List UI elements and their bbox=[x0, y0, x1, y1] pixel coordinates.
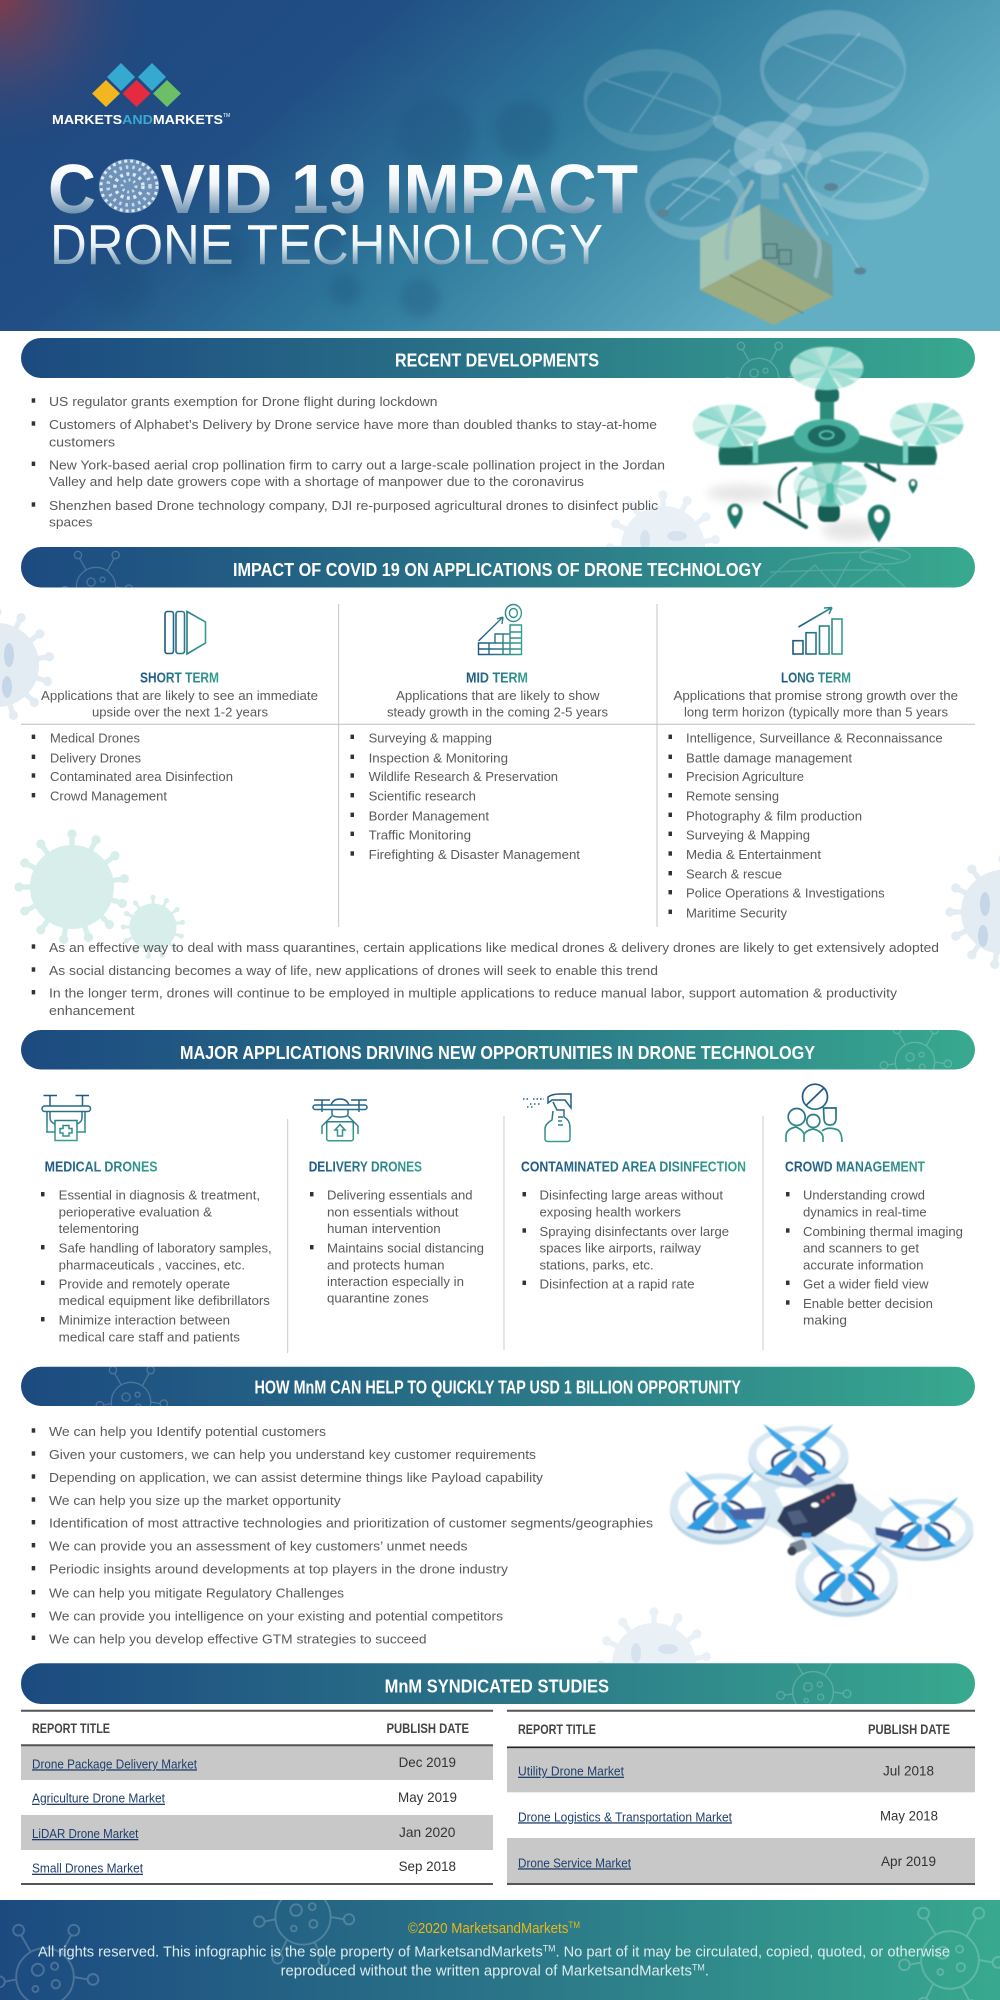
parcel bbox=[700, 204, 833, 325]
table: left reports: Small Drones Market bbox=[32, 1861, 143, 1876]
column: long term bbox=[668, 608, 958, 920]
list: mid term: Wildlife Research & Preservation bbox=[369, 769, 558, 784]
decorative virus: help section bbox=[597, 1608, 711, 1663]
logo: TM bbox=[223, 113, 230, 119]
list: contaminated area disinfection: Disinfection at a rapid rate bbox=[540, 1276, 694, 1291]
description: short term: upside over the next 1-2 years bbox=[92, 705, 268, 720]
legal notice: All rights reserved. This infographic is the sole property of MarketsandMarkets bbox=[38, 1944, 555, 1961]
list: contaminated area disinfection: spaces like airports, railway bbox=[540, 1241, 702, 1256]
table: left reports: Dec 2019 bbox=[399, 1754, 456, 1770]
list: mid term: Scientific research bbox=[369, 789, 476, 804]
logo bbox=[52, 63, 230, 127]
description: mid term bbox=[387, 688, 608, 720]
logo: MARKETS AND MARKETS bbox=[52, 113, 223, 127]
list: how mnm can help: Periodic insights around developments at top players in the drone industry bbox=[49, 1562, 509, 1577]
table: left reports: Sep 2018 bbox=[399, 1858, 456, 1874]
list: mid term: Border Management bbox=[369, 808, 489, 823]
list: crowd management: Combining thermal imaging bbox=[803, 1224, 963, 1239]
legal notice: . bbox=[705, 1962, 709, 1979]
table: right reports: REPORT TITLE bbox=[518, 1722, 596, 1737]
list: how mnm can help: Depending on application, we can assist determine things like Payload capability bbox=[49, 1470, 544, 1485]
icon: mid term growth stack bbox=[478, 604, 522, 654]
icon: spray bottle bbox=[523, 1094, 571, 1142]
list: delivery drones: quarantine zones bbox=[327, 1291, 429, 1306]
list: mid term: Surveying & mapping bbox=[369, 730, 492, 745]
hub bbox=[794, 419, 860, 457]
heading: medical drones: MEDICAL DRONES bbox=[45, 1159, 158, 1176]
list: recent developments: New York-based aerial crop pollination firm to carry out a large-scale pollination project in the Jordan bbox=[49, 457, 665, 472]
list: delivery drones: human intervention bbox=[327, 1221, 441, 1236]
list: long term: Media & Entertainment bbox=[686, 847, 821, 862]
decorative virus: behind drone bbox=[606, 490, 720, 547]
footer bbox=[0, 1900, 1000, 2000]
list: long term: Photography & film production bbox=[686, 808, 862, 823]
description: long term bbox=[674, 688, 958, 720]
list: crowd management: Enable better decision bbox=[803, 1296, 933, 1311]
list: recent developments: Customers of Alphabet’s Delivery by Drone service have more than doubled thanks to stay-at-home bbox=[49, 417, 657, 432]
legal notice bbox=[38, 1944, 950, 1979]
column: mid term bbox=[350, 604, 608, 862]
list: medical drones: Provide and remotely operate bbox=[59, 1276, 230, 1291]
list: how mnm can help: Identification of most attractive technologies and prioritization of customer segments/geographies bbox=[49, 1516, 654, 1531]
list: medical drones: telementoring bbox=[59, 1221, 139, 1236]
list: impact takeaways: As an effective way to deal with mass quarantines, certain applications like medical drones & delivery drones are likely to get extensively adopted bbox=[49, 940, 939, 955]
table: left reports: REPORT TITLE bbox=[32, 1721, 110, 1736]
map pins bbox=[727, 504, 743, 529]
icon: short term panels bbox=[165, 612, 206, 654]
list: medical drones: medical equipment like defibrillators bbox=[59, 1293, 271, 1308]
list: long term: Search & rescue bbox=[686, 867, 782, 882]
decorative virus: right edge bbox=[945, 854, 1000, 970]
heading: delivery drones: DELIVERY DRONES bbox=[309, 1159, 422, 1176]
decorative virus: left top bbox=[0, 607, 55, 723]
list: recent developments: customers bbox=[49, 435, 116, 450]
table: left reports: LiDAR Drone Market bbox=[32, 1826, 139, 1841]
icon: delivery drone bbox=[313, 1099, 367, 1141]
list: impact takeaways: As social distancing becomes a way of life, new applications of drones will seek to enable this trend bbox=[49, 963, 658, 978]
heading: long term: LONG TERM bbox=[781, 670, 851, 687]
banner: recent developments: RECENT DEVELOPMENTS bbox=[395, 350, 599, 370]
heading: crowd management: CROWD MANAGEMENT bbox=[785, 1159, 925, 1176]
list: short term: Delivery Drones bbox=[50, 750, 141, 765]
illustration: delivery drone with parcel bbox=[584, 10, 929, 325]
title line 2: DRONE TECHNOLOGY bbox=[50, 213, 603, 277]
list: long term: Police Operations & Investigations bbox=[686, 886, 885, 901]
list: short term: Crowd Management bbox=[50, 789, 167, 804]
copyright: ©2020 MarketsandMarkets bbox=[408, 1920, 588, 1937]
list: impact takeaways: enhancement bbox=[49, 1003, 135, 1018]
rear arm bbox=[815, 372, 839, 430]
heading: contaminated area disinfection: CONTAMINATED AREA DISINFECTION bbox=[521, 1159, 746, 1176]
list: mid term: Firefighting & Disaster Management bbox=[369, 847, 580, 862]
table: right reports: PUBLISH DATE bbox=[868, 1722, 950, 1737]
list: crowd management: dynamics in real-time bbox=[803, 1204, 927, 1219]
icon: virus in title bbox=[99, 159, 159, 213]
list: crowd management: accurate information bbox=[803, 1257, 924, 1272]
banner: major applications: MAJOR APPLICATIONS DRIVING NEW OPPORTUNITIES IN DRONE TECHNOLOGY bbox=[180, 1042, 816, 1063]
list: crowd management: making bbox=[803, 1313, 847, 1328]
list: crowd management: Understanding crowd bbox=[803, 1188, 925, 1203]
table: left reports: Jan 2020 bbox=[399, 1824, 456, 1840]
heading: mid term: MID TERM bbox=[466, 670, 528, 687]
title line 1: C bbox=[48, 150, 96, 228]
table: left reports: PUBLISH DATE bbox=[386, 1721, 469, 1736]
table: right reports: Drone Service Market bbox=[518, 1855, 631, 1870]
description: mid term: Applications that are likely to show bbox=[396, 688, 600, 703]
list: medical drones: perioperative evaluation & bbox=[59, 1204, 212, 1219]
table: left reports bbox=[21, 1711, 493, 1884]
list: contaminated area disinfection: Disinfecting large areas without bbox=[540, 1188, 723, 1203]
icon: long term bar chart bbox=[793, 608, 842, 654]
banner: major applications bbox=[21, 1030, 975, 1070]
banner: recent developments bbox=[21, 338, 975, 378]
column: contaminated area disinfection bbox=[521, 1094, 746, 1291]
banner: syndicated studies bbox=[21, 1663, 975, 1704]
list: delivery drones: Delivering essentials and bbox=[327, 1188, 473, 1203]
list: recent developments bbox=[32, 394, 665, 530]
list: contaminated area disinfection: exposing health workers bbox=[540, 1204, 681, 1219]
list: long term: Precision Agriculture bbox=[686, 769, 804, 784]
banner: syndicated studies: MnM SYNDICATED STUDIES bbox=[385, 1676, 609, 1697]
list: crowd management: Get a wider field view bbox=[803, 1276, 929, 1291]
list: recent developments: Valley and help date growers cope with a shortage of manpower due to the coronavirus bbox=[49, 474, 585, 489]
column: medical drones bbox=[41, 1096, 272, 1344]
illustration: teal quadcopter bbox=[693, 347, 963, 542]
drone body bbox=[777, 1484, 857, 1538]
list: medical drones: medical care staff and patients bbox=[59, 1329, 241, 1344]
column: short term bbox=[32, 612, 318, 804]
banner: how mnm can help bbox=[21, 1366, 975, 1406]
icon: medical drone bbox=[42, 1096, 90, 1140]
column: crowd management bbox=[785, 1084, 963, 1328]
side arms bbox=[718, 435, 936, 465]
heading: short term: SHORT TERM bbox=[140, 670, 219, 687]
table: right reports bbox=[507, 1711, 975, 1884]
list: contaminated area disinfection: Spraying disinfectants over large bbox=[540, 1224, 729, 1239]
column: delivery drones bbox=[309, 1099, 484, 1306]
list: short term: Contaminated area Disinfection bbox=[50, 769, 233, 784]
list: how mnm can help: Given your customers, we can help you understand key customer requirements bbox=[49, 1447, 537, 1462]
list: crowd management bbox=[786, 1188, 963, 1328]
list: medical drones: Essential in diagnosis & treatment, bbox=[59, 1188, 260, 1203]
list: medical drones bbox=[41, 1188, 272, 1344]
list: recent developments: spaces bbox=[49, 515, 93, 530]
description: short term bbox=[41, 688, 318, 720]
list: recent developments: Shenzhen based Drone technology company, DJI re-purposed agricultural drones to disinfect public bbox=[49, 498, 659, 513]
list: medical drones: Minimize interaction between bbox=[59, 1313, 230, 1328]
description: long term: Applications that promise strong growth over the bbox=[674, 688, 958, 703]
legal notice: TM bbox=[692, 1962, 705, 1972]
list: crowd management: and scanners to get bbox=[803, 1241, 919, 1256]
list: contaminated area disinfection bbox=[522, 1188, 729, 1291]
copyright: TM bbox=[568, 1920, 580, 1930]
description: long term: long term horizon (typically more than 5 years bbox=[684, 705, 948, 720]
legal notice: reproduced without the written approval of MarketsandMarkets bbox=[281, 1962, 696, 1979]
banner: impact of covid 19: IMPACT OF COVID 19 ON APPLICATIONS OF DRONE TECHNOLOGY bbox=[233, 559, 763, 580]
table: left reports: May 2019 bbox=[398, 1789, 457, 1805]
list: delivery drones bbox=[310, 1188, 484, 1306]
list: how mnm can help bbox=[32, 1424, 654, 1646]
list: short term: Medical Drones bbox=[50, 730, 140, 745]
list: how mnm can help: We can help you mitigate Regulatory Challenges bbox=[49, 1586, 345, 1601]
list: short term bbox=[32, 730, 233, 804]
description: mid term: steady growth in the coming 2-5 years bbox=[387, 705, 608, 720]
front arm bbox=[812, 462, 842, 505]
list: how mnm can help: We can provide you intelligence on your existing and potential competitors bbox=[49, 1609, 504, 1624]
list: medical drones: Safe handling of laboratory samples, bbox=[59, 1241, 272, 1256]
list: delivery drones: interaction especially in bbox=[327, 1274, 464, 1289]
list: impact takeaways bbox=[32, 940, 939, 1018]
table: right reports: Utility Drone Market bbox=[518, 1764, 624, 1779]
table: left reports: Agriculture Drone Market bbox=[32, 1791, 165, 1806]
panel: major applications bbox=[41, 1084, 963, 1353]
banner: how mnm can help: HOW MnM CAN HELP TO QUICKLY TAP USD 1 BILLION OPPORTUNITY bbox=[254, 1376, 742, 1397]
list: recent developments: US regulator grants exemption for Drone flight during lockdown bbox=[49, 394, 438, 409]
list: contaminated area disinfection: stations, parks, etc. bbox=[540, 1257, 654, 1272]
list: mid term: Inspection & Monitoring bbox=[369, 750, 508, 765]
list: how mnm can help: We can help you develop effective GTM strategies to succeed bbox=[49, 1631, 427, 1646]
table: right reports: Jul 2018 bbox=[883, 1763, 934, 1779]
legal notice: . No part of it may be circulated, copied, quoted, or otherwise bbox=[555, 1944, 950, 1961]
hero banner bbox=[0, 0, 1000, 331]
table: right reports: May 2018 bbox=[880, 1808, 938, 1824]
list: long term: Maritime Security bbox=[686, 905, 787, 920]
list: delivery drones: non essentials without bbox=[327, 1204, 459, 1219]
description: short term: Applications that are likely to see an immediate bbox=[41, 688, 318, 703]
list: mid term bbox=[350, 730, 580, 862]
table: right reports: Apr 2019 bbox=[881, 1853, 936, 1869]
list: how mnm can help: We can help you Identify potential customers bbox=[49, 1424, 327, 1439]
title line 1: VID 19 IMPACT bbox=[160, 150, 638, 228]
list: how mnm can help: We can provide you an assessment of key customers’ unmet needs bbox=[49, 1539, 468, 1554]
panel: term columns bbox=[21, 604, 975, 927]
table: left reports: Drone Package Delivery Market bbox=[32, 1756, 197, 1771]
list: impact takeaways: In the longer term, drones will continue to be employed in multiple applications to reduce manual labor, support automation & productivity bbox=[49, 986, 898, 1001]
list: long term: Remote sensing bbox=[686, 789, 779, 804]
legal notice: TM bbox=[543, 1944, 555, 1954]
list: mid term: Traffic Monitoring bbox=[369, 827, 471, 842]
decorative virus: teal small bbox=[121, 895, 185, 959]
banner: impact of covid 19 bbox=[21, 547, 975, 588]
list: long term: Surveying & Mapping bbox=[686, 827, 810, 842]
table: right reports: Drone Logistics & Transportation Market bbox=[518, 1809, 732, 1824]
camera bbox=[788, 1539, 808, 1556]
icon: no crowd bbox=[786, 1084, 842, 1142]
list: delivery drones: Maintains social distancing bbox=[327, 1241, 484, 1256]
list: how mnm can help: We can help you size up the market opportunity bbox=[49, 1493, 341, 1508]
decorative virus: teal large bbox=[14, 829, 130, 945]
list: delivery drones: and protects human bbox=[327, 1257, 444, 1272]
list: long term: Intelligence, Surveillance & Reconnaissance bbox=[686, 730, 943, 745]
illustration: blue ducted drone bbox=[670, 1424, 973, 1617]
list: long term: Battle damage management bbox=[686, 750, 852, 765]
list: medical drones: pharmaceuticals , vaccines, etc. bbox=[59, 1257, 245, 1272]
list: long term bbox=[668, 730, 943, 920]
